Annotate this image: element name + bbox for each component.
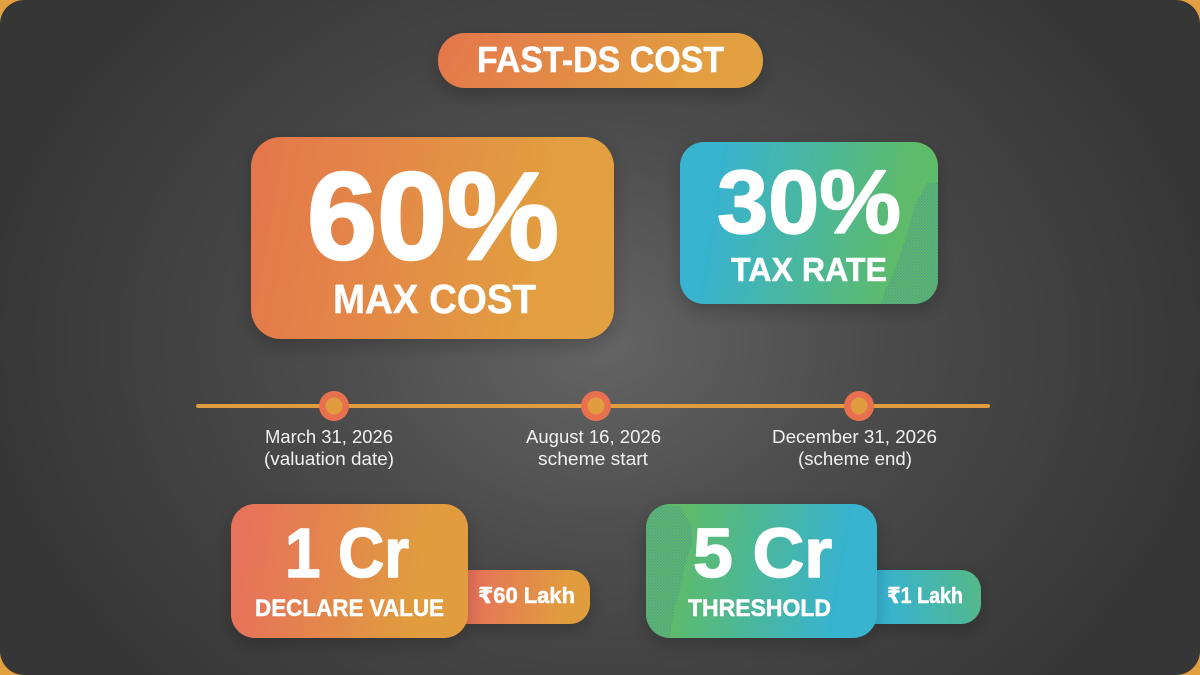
stat: 60%: 60% [307,148,559,286]
label: max cost: MAX COST [333,276,536,322]
pill: 60 lakh: ₹60 Lakh [478,583,575,608]
panel: 30% tax rate [680,142,938,304]
milestone: scheme start [526,391,661,469]
pill: 60 lakh [466,570,590,624]
label: declare value: DECLARE VALUE [255,595,444,622]
stat: 30%: 30% [717,153,901,253]
panel: 60% max cost [251,137,614,339]
stat: 1 Cr: 1 Cr [285,514,409,592]
title text: FAST-DS COST [477,39,724,80]
milestone: scheme end [772,391,937,469]
milestone: scheme end: (scheme end) [798,449,912,469]
milestone: valuation date [264,391,394,469]
label: tax rate: TAX RATE [731,251,887,288]
label: threshold: THRESHOLD [688,595,831,622]
milestone: valuation date: March 31, 2026 [265,427,393,447]
milestone: scheme end: December 31, 2026 [772,427,937,447]
title pill [438,33,763,88]
timeline [196,391,990,469]
panel: 1 Cr declare value [231,504,590,638]
panel: 5 Cr threshold [646,504,981,638]
pill: 1 lakh [875,570,981,624]
milestone: valuation date: (valuation date) [264,449,394,469]
milestone: scheme start: August 16, 2026 [526,427,661,447]
stat: 5 Cr: 5 Cr [693,514,832,592]
milestone: scheme start: scheme start [538,449,648,469]
pill: 1 lakh: ₹1 Lakh [887,583,963,608]
